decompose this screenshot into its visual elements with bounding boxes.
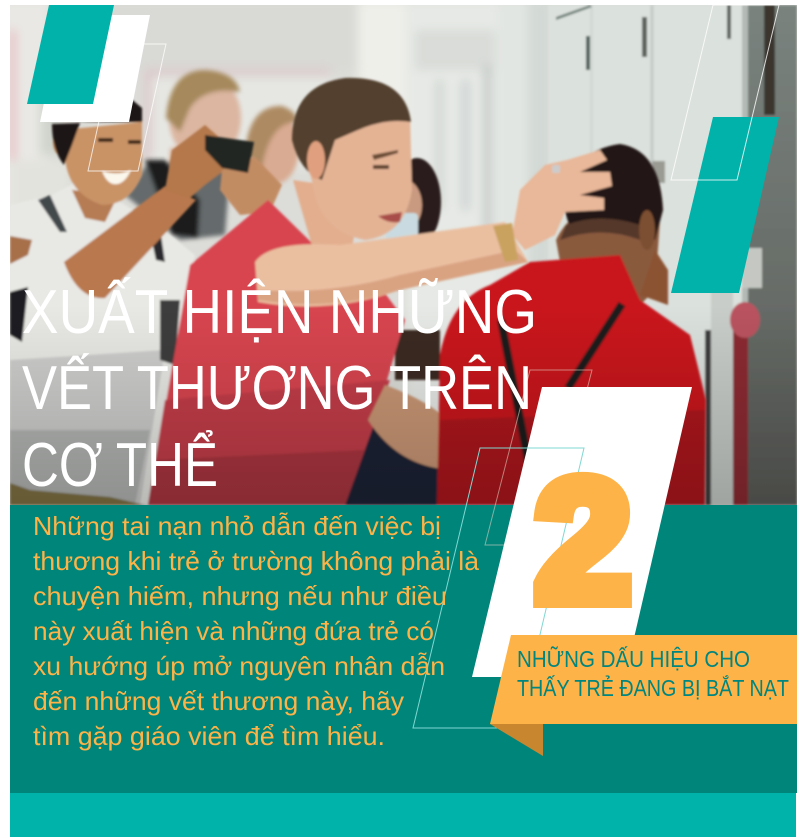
shape: teal parallelogram top left bbox=[27, 5, 114, 104]
outline frame: top left bbox=[88, 44, 166, 171]
body text: thương khi trẻ ở trường không phải là bbox=[33, 546, 480, 576]
background girl bbox=[260, 120, 300, 185]
panel: photo of students bullying a boy at the lockers bbox=[0, 0, 797, 510]
title: XUẤT HIỆN NHỮNG bbox=[22, 278, 537, 347]
main student neck and head bbox=[293, 180, 360, 250]
body text: đến những vết thương này, hãy bbox=[33, 686, 404, 716]
left student head bbox=[72, 190, 118, 222]
outline frame: behind number bbox=[485, 370, 592, 545]
left student arm and hands bbox=[64, 186, 196, 298]
ribbon with subtitle: NHỮNG DẤU HIỆU CHO bbox=[517, 645, 750, 672]
main student raised arm bbox=[255, 222, 528, 306]
body text: này xuất hiện và những đứa trẻ có bbox=[33, 616, 434, 646]
victim shirt bbox=[437, 255, 706, 505]
shape: white parallelogram behind number bbox=[472, 387, 692, 677]
title: VẾT THƯƠNG TRÊN bbox=[22, 354, 532, 423]
victim hair bbox=[560, 144, 663, 240]
ribbon fold bbox=[490, 724, 543, 756]
ribbon with subtitle bbox=[490, 635, 797, 724]
main student hand bbox=[512, 150, 612, 250]
phone bbox=[205, 135, 254, 173]
body text: xu hướng úp mở nguyên nhân dẫn bbox=[33, 651, 445, 681]
body text: Những tai nạn nhỏ dẫn đến việc bị bbox=[33, 511, 441, 541]
body text bbox=[33, 511, 480, 751]
panel: light teal footer band bbox=[10, 793, 796, 837]
backpack straps bbox=[501, 320, 530, 470]
main student lower arm bbox=[366, 384, 440, 470]
panel: dark teal content band bbox=[10, 505, 797, 793]
outline frame: top right bbox=[671, 5, 779, 180]
shape: white parallelogram top left bbox=[40, 15, 150, 122]
title: CƠ THỂ bbox=[22, 431, 218, 500]
shape: teal parallelogram right bbox=[671, 117, 779, 293]
left student shirt bbox=[10, 180, 195, 505]
outline frame: teal bbox=[413, 448, 584, 728]
body text: tìm gặp giáo viên để tìm hiểu. bbox=[33, 721, 385, 751]
body text: chuyện hiếm, nhưng nếu như điều bbox=[33, 581, 447, 611]
far girl behind bbox=[410, 156, 443, 236]
title bbox=[22, 278, 537, 500]
background student with blond hair bbox=[167, 88, 244, 147]
number 2: 2 bbox=[535, 445, 631, 637]
main student red shirt bbox=[165, 200, 406, 402]
victim neck bbox=[556, 208, 660, 305]
